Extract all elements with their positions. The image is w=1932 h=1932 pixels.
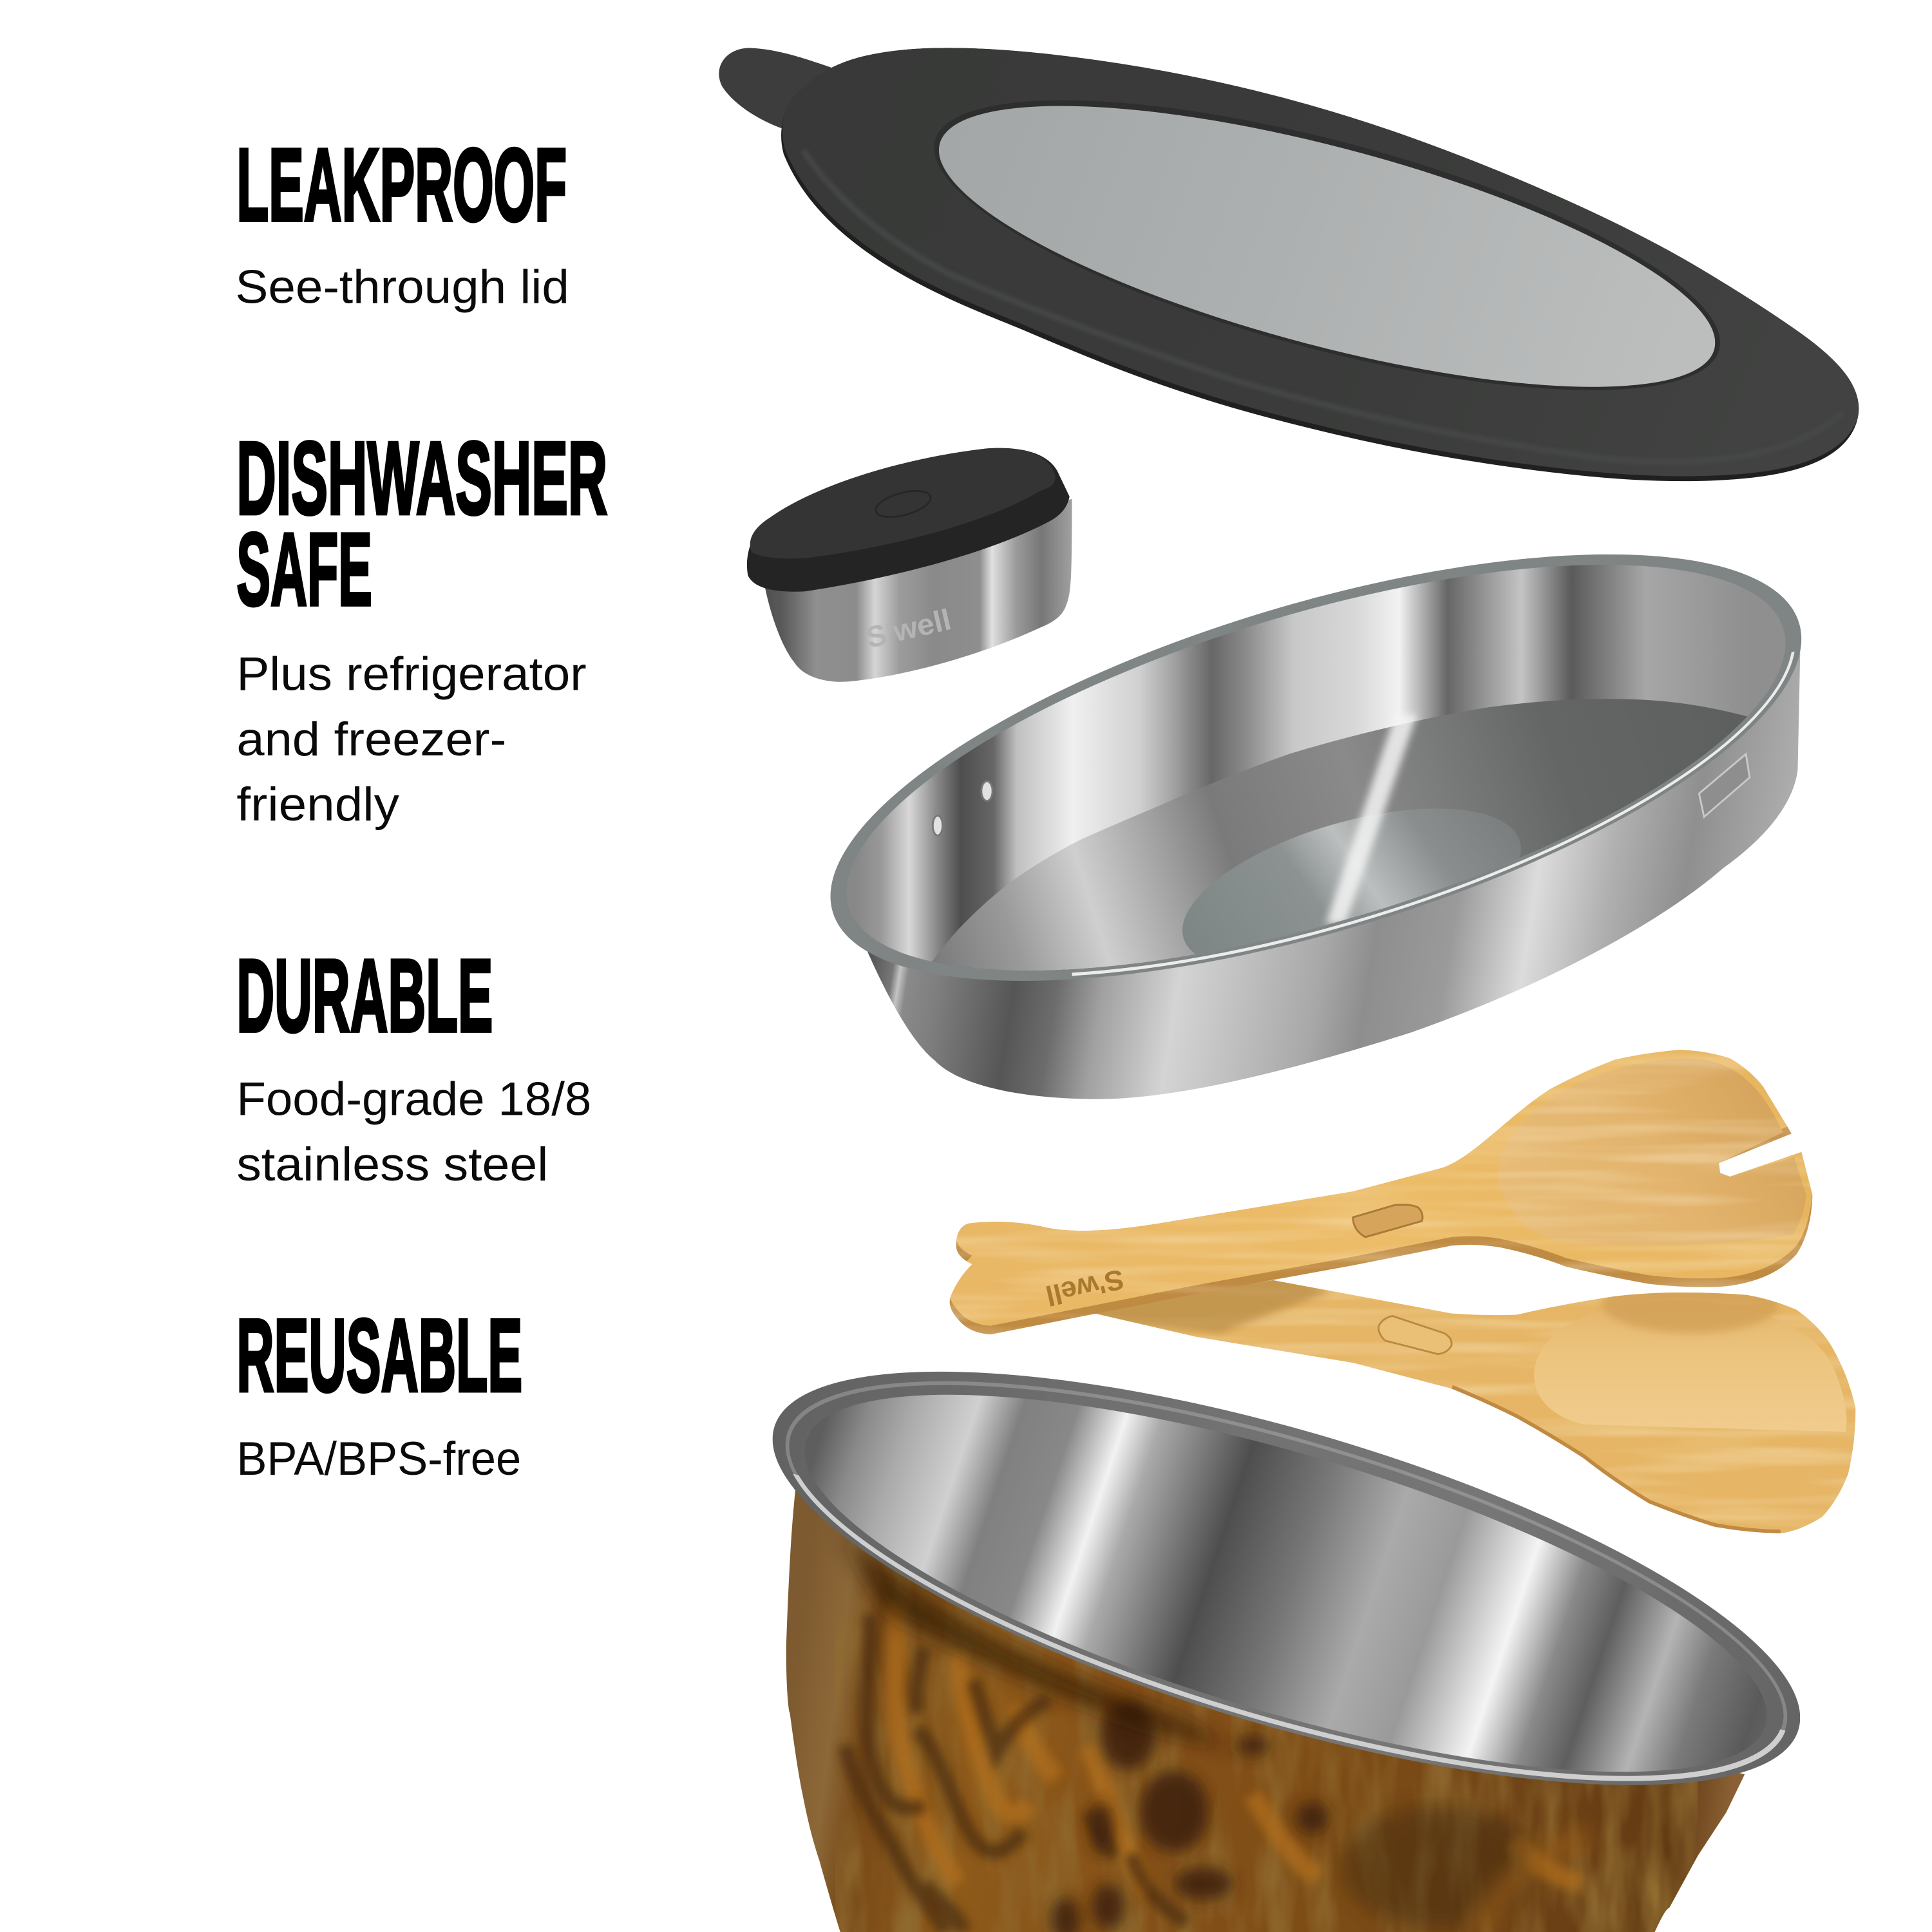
feature text column xyxy=(235,128,607,1485)
bowl wood exterior xyxy=(776,1466,1750,1932)
container steel body xyxy=(764,499,1072,682)
bowl wood swirl grain xyxy=(846,1614,1187,1932)
text: Food-grade 18/8 stainless steel: Food-grade 18/8 xyxy=(236,1072,591,1126)
text: Plus refrigerator and freezer-friendly xyxy=(236,647,587,831)
container logo: S'well xyxy=(862,602,954,654)
product: bamboo slotted server xyxy=(943,1041,1824,1343)
tray interior xyxy=(846,565,1785,971)
text: See-through lid: See-through lid xyxy=(235,260,569,314)
tray handle slot xyxy=(1699,754,1750,817)
lid window groove xyxy=(934,41,1720,450)
spoon lower lip xyxy=(1452,1388,1781,1533)
tray rim xyxy=(831,469,1801,1066)
lid ridge highlight xyxy=(802,151,1606,460)
heading: Reusable: REUSABLE xyxy=(236,1298,522,1414)
text: Food-grade 18/8 stainless steel xyxy=(236,1072,591,1191)
text: BPA/BPS-free: BPA/BPS-free xyxy=(236,1432,521,1485)
container black lid xyxy=(747,448,1070,592)
container lid top face xyxy=(750,448,1056,558)
tray highlight streak xyxy=(1326,715,1417,924)
heading: Dishwasher safe: DISHWASHER xyxy=(236,421,607,536)
product: small dip container xyxy=(747,448,1072,682)
tray centre disc xyxy=(1182,809,1521,954)
tray outer wall xyxy=(866,653,1800,1099)
product: wood-finish salad bowl xyxy=(764,1302,1811,1932)
bowl wood orange streaks xyxy=(895,1601,1582,1893)
bowl dark band under rim xyxy=(838,1528,1232,1750)
lid pull tab xyxy=(719,48,835,131)
text: Plus refrigerator and freezer-friendly: friendly xyxy=(236,777,399,831)
server body xyxy=(943,1041,1824,1343)
lid rim xyxy=(770,37,1873,487)
text: Food-grade 18/8 stainless steel: stainless steel xyxy=(236,1137,548,1191)
spoon body xyxy=(1059,1269,1867,1540)
text: Plus refrigerator and freezer-friendly: Plus refrigerator xyxy=(236,647,587,700)
container lid emboss xyxy=(873,486,933,522)
text: Plus refrigerator and freezer-friendly: and freezer- xyxy=(236,712,506,766)
server handle slot xyxy=(1353,1205,1423,1237)
bowl wood burl knots xyxy=(1051,1701,1329,1932)
spoon hollow shadow xyxy=(1602,1274,1779,1333)
server bowl hollow xyxy=(1499,1058,1806,1246)
tray floor xyxy=(933,699,1747,971)
spoon tab xyxy=(1379,1316,1452,1354)
bowl rim xyxy=(764,1361,1811,1805)
heading: Durable: DURABLE xyxy=(236,938,493,1054)
heading: Dishwasher safe xyxy=(236,421,607,627)
heading: Leakproof: LEAKPROOF xyxy=(236,128,567,243)
tray rivets xyxy=(933,781,992,835)
server logo: S'well xyxy=(1043,1263,1127,1311)
bowl steel interior xyxy=(795,1386,1781,1793)
product: black lid with see-through window xyxy=(719,37,1873,487)
bowl rim highlight xyxy=(788,1302,1785,1861)
tray front rim highlight xyxy=(1072,652,1795,976)
lid window xyxy=(939,106,1716,387)
spoon bowl hollow xyxy=(1534,1300,1846,1432)
heading: Dishwasher safe: SAFE xyxy=(236,512,372,627)
product: bamboo serving spoon xyxy=(1059,1269,1867,1540)
product: stainless steel tray xyxy=(831,554,1802,1099)
bowl right side shading xyxy=(1341,1805,1538,1928)
spoon shadow from server xyxy=(1059,1269,1331,1333)
